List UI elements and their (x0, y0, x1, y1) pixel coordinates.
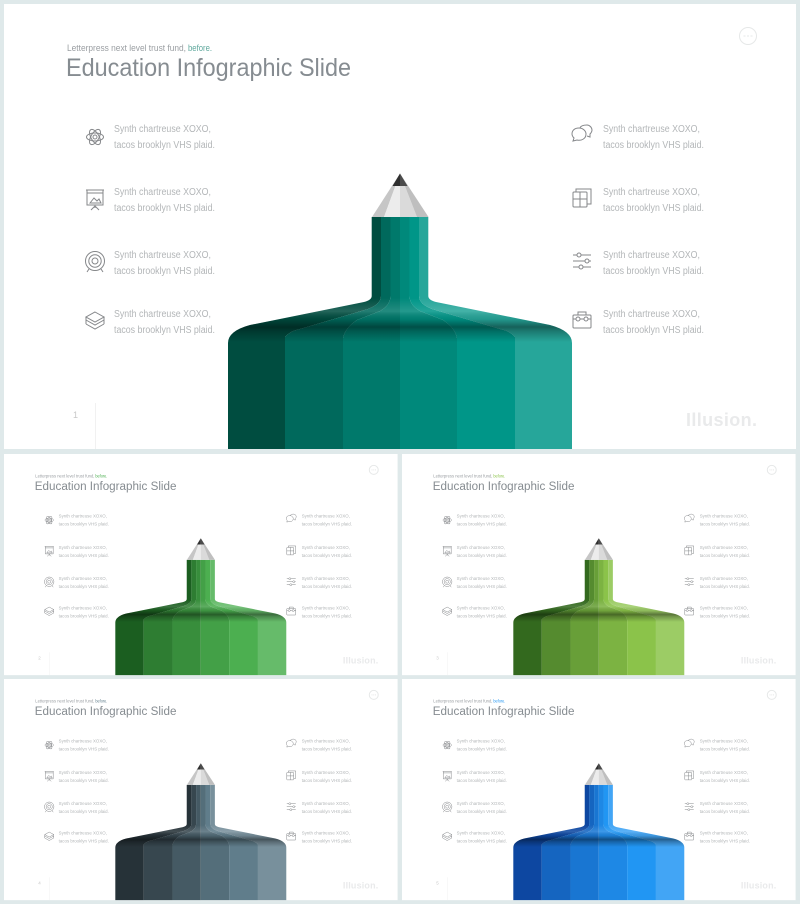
item: atom: tacos brooklyn VHS plaid. (59, 522, 109, 528)
item: sliders: tacos brooklyn VHS plaid. (302, 584, 352, 590)
item: atom (45, 739, 109, 753)
item: atom (86, 124, 215, 151)
item: atom: Synth chartreuse XOXO, (114, 124, 211, 135)
item: grid (685, 770, 750, 784)
item: briefcase: tacos brooklyn VHS plaid. (700, 614, 750, 620)
item: layers (45, 831, 109, 845)
subtitle: before. (95, 698, 107, 704)
item: layers (443, 831, 507, 845)
item: layers: tacos brooklyn VHS plaid. (114, 325, 215, 336)
item: layers: Synth chartreuse XOXO, (457, 831, 505, 837)
item: sliders: tacos brooklyn VHS plaid. (700, 584, 750, 590)
panel: slate slide (4, 679, 398, 900)
item: atom: tacos brooklyn VHS plaid. (457, 747, 507, 753)
item: grid: Synth chartreuse XOXO, (302, 545, 350, 551)
page number: 2 (38, 656, 41, 661)
page number: 3 (436, 656, 439, 661)
subtitle: before. (95, 473, 107, 479)
item: sliders: tacos brooklyn VHS plaid. (302, 809, 352, 815)
item: sliders: tacos brooklyn VHS plaid. (603, 266, 704, 277)
item: sliders (685, 576, 750, 590)
item: target: Synth chartreuse XOXO, (457, 576, 505, 582)
subtitle: Letterpress next level trust fund, (35, 698, 94, 704)
item: grid: Synth chartreuse XOXO, (302, 770, 350, 776)
panel: light green slide (402, 454, 796, 675)
page number: 5 (436, 881, 439, 886)
item: sliders: Synth chartreuse XOXO, (302, 576, 350, 582)
item: target: tacos brooklyn VHS plaid. (59, 584, 109, 590)
item: layers: Synth chartreuse XOXO, (457, 606, 505, 612)
menu icon (767, 690, 776, 699)
title: Education Infographic Slide (433, 704, 575, 718)
pencil graphic (228, 174, 572, 449)
item: briefcase: tacos brooklyn VHS plaid. (603, 325, 704, 336)
page number: 4 (38, 881, 41, 886)
item: chat: Synth chartreuse XOXO, (302, 514, 350, 520)
item: grid: Synth chartreuse XOXO, (603, 187, 700, 198)
item: target: Synth chartreuse XOXO, (59, 801, 107, 807)
item: sliders (287, 801, 352, 815)
item: layers: tacos brooklyn VHS plaid. (457, 614, 507, 620)
item: presentation board: Synth chartreuse XOXO, (59, 770, 107, 776)
subtitle: before. (493, 698, 505, 704)
item: presentation board (443, 545, 507, 559)
item: sliders: Synth chartreuse XOXO, (700, 576, 748, 582)
logo: Illusion. (343, 881, 379, 891)
item: target (44, 576, 109, 590)
item: briefcase: Synth chartreuse XOXO, (302, 606, 350, 612)
item: sliders: Synth chartreuse XOXO, (302, 801, 350, 807)
item: target: tacos brooklyn VHS plaid. (457, 809, 507, 815)
item: grid: tacos brooklyn VHS plaid. (603, 203, 704, 214)
item: briefcase: Synth chartreuse XOXO, (603, 309, 700, 320)
pencil graphic (115, 538, 286, 675)
item: chat (286, 739, 352, 753)
page number: 1 (73, 410, 78, 420)
item: briefcase: tacos brooklyn VHS plaid. (302, 614, 352, 620)
item: grid: Synth chartreuse XOXO, (700, 770, 748, 776)
logo: Illusion. (741, 656, 777, 666)
item: sliders: Synth chartreuse XOXO, (700, 801, 748, 807)
item: briefcase: tacos brooklyn VHS plaid. (700, 839, 750, 845)
item: atom: Synth chartreuse XOXO, (59, 514, 107, 520)
item: target: Synth chartreuse XOXO, (457, 801, 505, 807)
title: Education Infographic Slide (35, 704, 177, 718)
item: target: tacos brooklyn VHS plaid. (114, 266, 215, 277)
item: chat (684, 514, 750, 528)
menu icon (740, 28, 756, 44)
page number (436, 877, 447, 900)
item: presentation board: Synth chartreuse XOXO, (457, 770, 505, 776)
item: chat: Synth chartreuse XOXO, (700, 514, 748, 520)
item: target: tacos brooklyn VHS plaid. (59, 809, 109, 815)
panel: teal main slide (4, 4, 796, 449)
item: chat: tacos brooklyn VHS plaid. (700, 747, 750, 753)
item: chat: Synth chartreuse XOXO, (603, 124, 700, 135)
item: grid: tacos brooklyn VHS plaid. (700, 553, 750, 559)
item: presentation board (443, 770, 507, 784)
item: layers: Synth chartreuse XOXO, (114, 309, 211, 320)
item: sliders (573, 250, 704, 277)
item: target (442, 576, 507, 590)
item: layers: Synth chartreuse XOXO, (59, 606, 107, 612)
item: briefcase: Synth chartreuse XOXO, (302, 831, 350, 837)
item: briefcase (287, 606, 352, 620)
menu icon (369, 690, 378, 699)
item: chat (684, 739, 750, 753)
subtitle: Letterpress next level trust fund, (35, 473, 94, 479)
item: presentation board: Synth chartreuse XOXO, (114, 187, 211, 198)
item: chat: tacos brooklyn VHS plaid. (302, 522, 352, 528)
item: atom (45, 514, 109, 528)
item: sliders (287, 576, 352, 590)
item: layers: tacos brooklyn VHS plaid. (59, 614, 109, 620)
item: atom: tacos brooklyn VHS plaid. (114, 140, 215, 151)
item: target: Synth chartreuse XOXO, (59, 576, 107, 582)
menu icon (767, 465, 776, 474)
item: target (44, 801, 109, 815)
panel: green slide (4, 454, 398, 675)
item: target: Synth chartreuse XOXO, (114, 250, 211, 261)
item: briefcase (685, 606, 750, 620)
subtitle: before. (493, 473, 505, 479)
item: grid (287, 770, 352, 784)
item: chat: tacos brooklyn VHS plaid. (302, 747, 352, 753)
item: atom: Synth chartreuse XOXO, (457, 739, 505, 745)
item: target (86, 250, 215, 277)
item: presentation board: tacos brooklyn VHS plaid. (59, 553, 109, 559)
item: atom (443, 739, 507, 753)
item: grid: tacos brooklyn VHS plaid. (700, 778, 750, 784)
item: presentation board: tacos brooklyn VHS plaid. (59, 778, 109, 784)
item: grid: tacos brooklyn VHS plaid. (302, 778, 352, 784)
item: chat: Synth chartreuse XOXO, (302, 739, 350, 745)
page number (436, 652, 447, 675)
page number (73, 403, 96, 449)
item: briefcase: Synth chartreuse XOXO, (700, 606, 748, 612)
item: presentation board: tacos brooklyn VHS plaid. (457, 553, 507, 559)
pencil graphic (115, 763, 286, 900)
item: briefcase (685, 831, 750, 845)
item: layers: tacos brooklyn VHS plaid. (59, 839, 109, 845)
subtitle: Letterpress next level trust fund, (433, 473, 492, 479)
item: layers (45, 606, 109, 620)
subtitle: Letterpress next level trust fund, (67, 43, 186, 54)
item: target: tacos brooklyn VHS plaid. (457, 584, 507, 590)
title: Education Infographic Slide (35, 479, 177, 493)
item: briefcase (573, 309, 704, 336)
item: sliders (685, 801, 750, 815)
pencil graphic (513, 538, 684, 675)
item: layers: Synth chartreuse XOXO, (59, 831, 107, 837)
subtitle: before. (188, 43, 212, 54)
item: presentation board: Synth chartreuse XOXO, (59, 545, 107, 551)
title: Education Infographic Slide (433, 479, 575, 493)
page number (38, 652, 49, 675)
item: chat: tacos brooklyn VHS plaid. (603, 140, 704, 151)
item: briefcase: tacos brooklyn VHS plaid. (302, 839, 352, 845)
item: grid: tacos brooklyn VHS plaid. (302, 553, 352, 559)
item: presentation board (86, 187, 215, 214)
logo: Illusion. (741, 881, 777, 891)
item: sliders: tacos brooklyn VHS plaid. (700, 809, 750, 815)
pencil graphic (513, 763, 684, 900)
logo: Illusion. (686, 410, 758, 430)
item: grid (573, 187, 704, 214)
menu icon (369, 465, 378, 474)
item: layers (443, 606, 507, 620)
item: chat: Synth chartreuse XOXO, (700, 739, 748, 745)
item: presentation board: Synth chartreuse XOXO, (457, 545, 505, 551)
item: chat (572, 124, 704, 151)
item: presentation board (45, 545, 109, 559)
item: presentation board: tacos brooklyn VHS plaid. (457, 778, 507, 784)
panel: blue slide (402, 679, 796, 900)
item: grid: Synth chartreuse XOXO, (700, 545, 748, 551)
item: atom: Synth chartreuse XOXO, (59, 739, 107, 745)
item: atom (443, 514, 507, 528)
page number (38, 877, 49, 900)
title: Education Infographic Slide (66, 54, 351, 82)
item: layers (86, 309, 215, 336)
logo: Illusion. (343, 656, 379, 666)
item: presentation board (45, 770, 109, 784)
item: presentation board: tacos brooklyn VHS plaid. (114, 203, 215, 214)
item: atom: Synth chartreuse XOXO, (457, 514, 505, 520)
item: briefcase: Synth chartreuse XOXO, (700, 831, 748, 837)
item: grid (287, 545, 352, 559)
item: grid (685, 545, 750, 559)
item: sliders: Synth chartreuse XOXO, (603, 250, 700, 261)
item: briefcase (287, 831, 352, 845)
item: atom: tacos brooklyn VHS plaid. (457, 522, 507, 528)
item: layers: tacos brooklyn VHS plaid. (457, 839, 507, 845)
item: chat (286, 514, 352, 528)
subtitle: Letterpress next level trust fund, (433, 698, 492, 704)
item: atom: tacos brooklyn VHS plaid. (59, 747, 109, 753)
item: target (442, 801, 507, 815)
item: chat: tacos brooklyn VHS plaid. (700, 522, 750, 528)
